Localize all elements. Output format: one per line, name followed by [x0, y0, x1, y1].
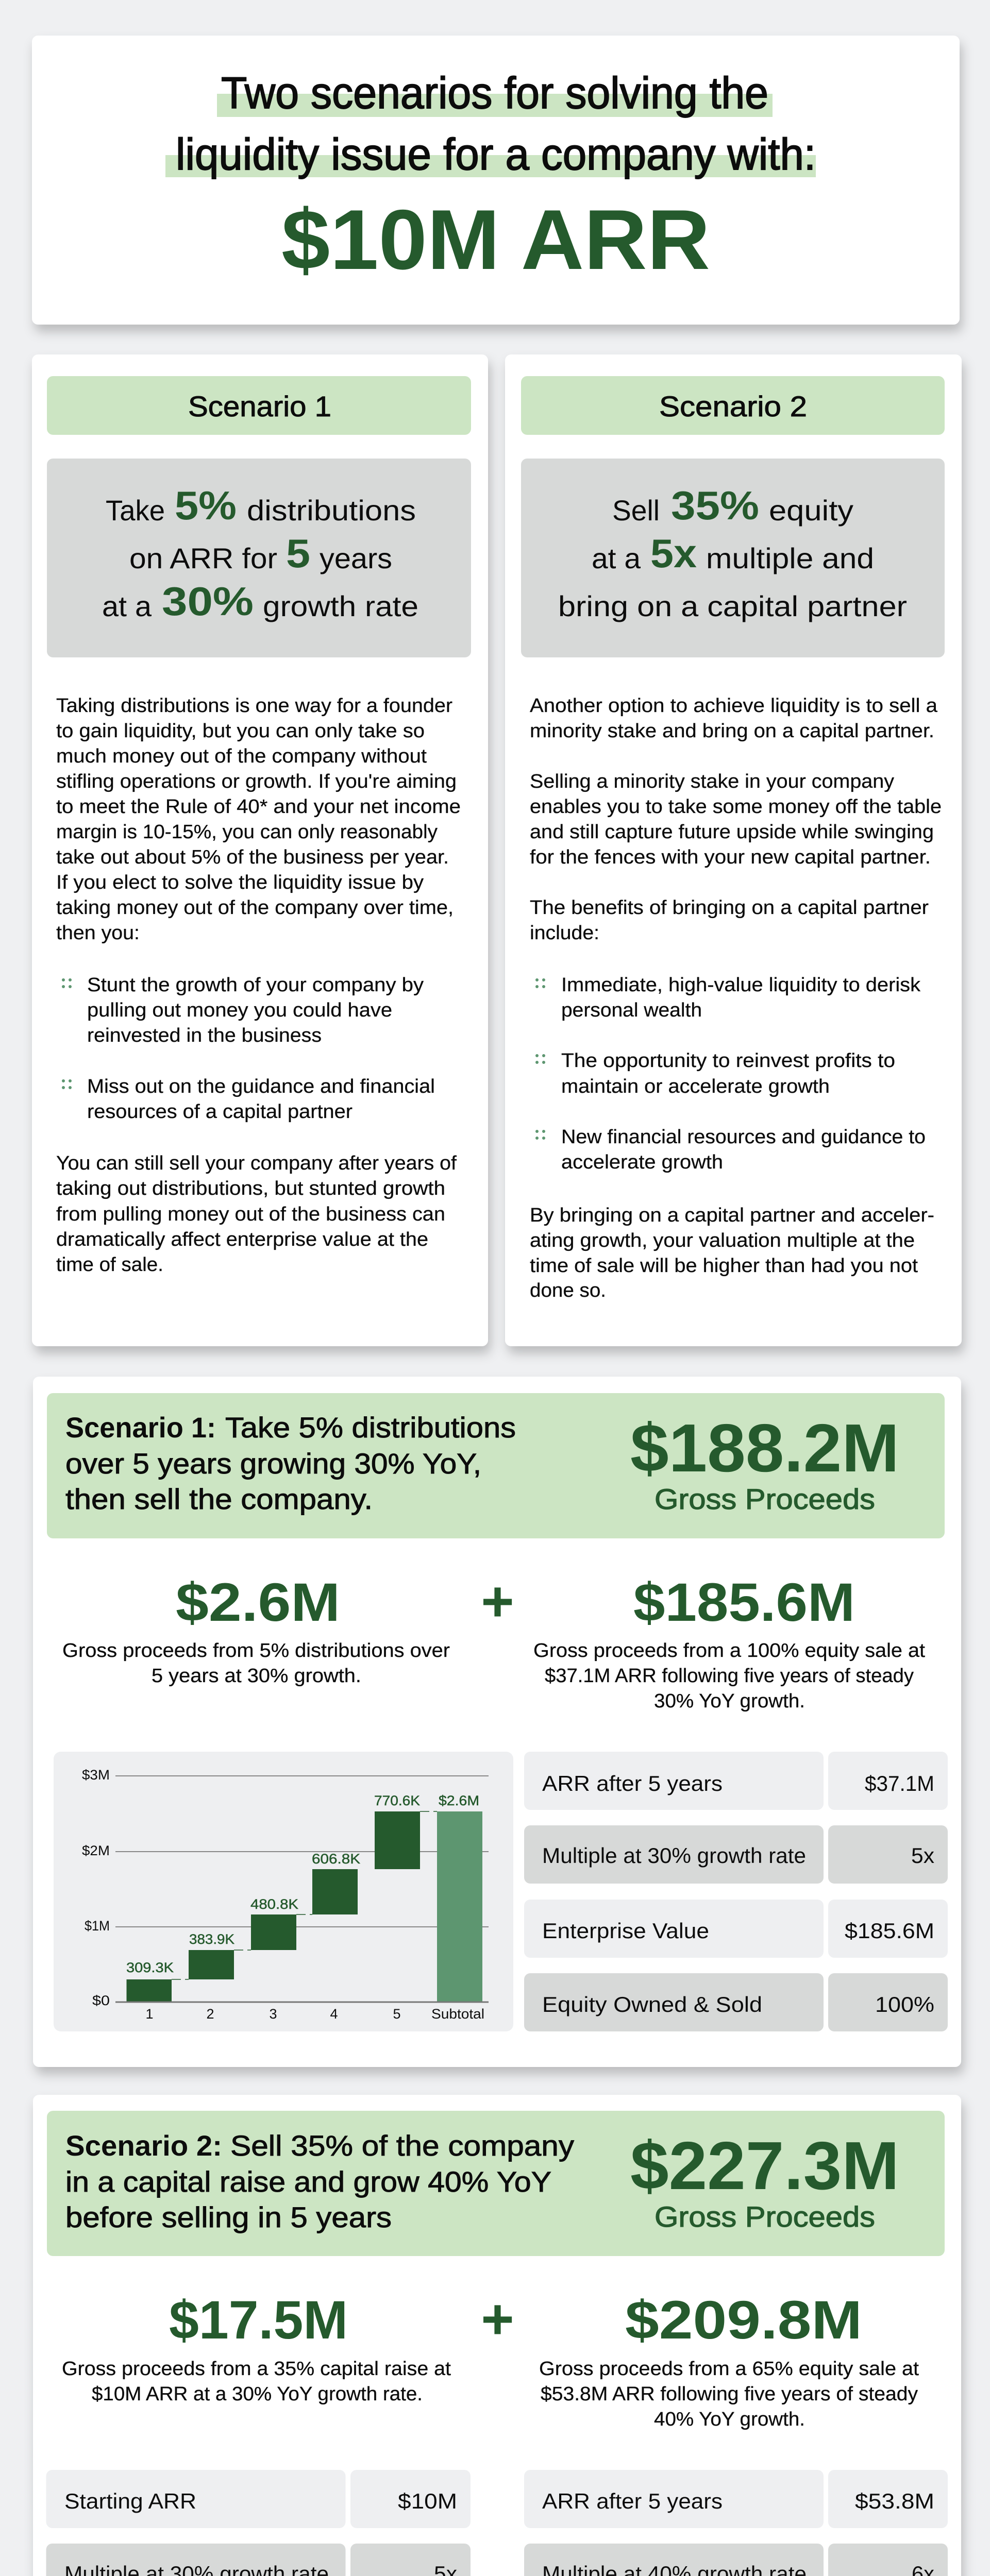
bullet: immediate liquidity: personal wealth	[561, 999, 702, 1021]
bullet: stunt the growth	[62, 974, 424, 1046]
callout: take 5% distributions: 30%	[162, 579, 254, 624]
panel: scenario 1 model	[33, 1377, 961, 2067]
header banner: scenario 1 summary: Scenario 1:	[65, 1411, 216, 1444]
table: exit metrics scenario 1: ARR after 5 years	[542, 1771, 723, 1795]
text block: taking distributions intro: taking money out of the company over time,	[56, 897, 454, 919]
x axis labels: 5	[393, 2006, 401, 2022]
headline figure: $10M ARR: $10M ARR	[281, 192, 710, 287]
figure: $17.5M capital raise: $17.5M	[169, 2290, 348, 2350]
bullet: stunt the growth: pulling out money you could have	[87, 999, 392, 1021]
callout: sell 35% equity: Sell	[612, 494, 660, 527]
text block: you can still sell: You can still sell your company after years of	[56, 1153, 457, 1174]
bullet: stunt the growth: reinvested in the business	[87, 1025, 322, 1046]
x axis labels: 2	[206, 2006, 214, 2022]
figure: $2.6M distributions	[62, 1572, 450, 1687]
bullet: immediate liquidity	[535, 974, 921, 1021]
text block: benefits intro: The benefits of bringing on a capital partner	[530, 897, 929, 919]
text block: taking distributions intro: margin is 10-15%, you can only reasonably	[56, 821, 438, 843]
callout: sell 35% equity: bring on a capital partner	[558, 590, 907, 622]
figure: $2.6M distributions: Gross proceeds from 5% distributions over	[62, 1640, 450, 1662]
figure: $185.6M equity sale: $37.1M ARR following five years of steady	[545, 1665, 914, 1687]
text block: by bringing on a capital partner: By bringing on a capital partner and acceler-	[530, 1205, 934, 1226]
text block: another option: minority stake and bring on a capital partner.	[530, 720, 934, 742]
x axis labels: 1	[145, 2006, 154, 2022]
figure: $209.8M equity sale: 40% YoY growth.	[654, 2409, 805, 2430]
text block: you can still sell: time of sale.	[56, 1254, 163, 1276]
y axis labels	[82, 1767, 110, 2008]
x axis labels: 3	[269, 2006, 277, 2022]
callout: sell 35% equity: 35%	[671, 483, 759, 528]
bullet: reinvest profits: The opportunity to reinvest profits to	[561, 1050, 895, 1072]
bullet: new financial resources: New financial resources and guidance to	[561, 1126, 926, 1148]
bars	[127, 1811, 482, 2002]
text block: another option	[530, 695, 938, 742]
text block: taking distributions intro: to meet the Rule of 40* and your net income	[56, 796, 461, 818]
callout: sell 35% equity: at a	[592, 542, 641, 574]
heading: Scenario 1: Scenario 1	[188, 390, 331, 422]
header banner: scenario 2 summary: before selling in 5 years	[65, 2201, 392, 2233]
text block: taking distributions intro	[56, 695, 461, 944]
text block: selling a minority stake: Selling a minority stake in your company	[530, 771, 894, 792]
callout: take 5% distributions: at a	[102, 590, 152, 622]
y axis labels: $3M	[82, 1767, 110, 1783]
heading: Scenario 2	[521, 376, 945, 435]
callout: sell 35% equity: multiple and	[706, 542, 874, 574]
x axis labels	[145, 2006, 484, 2022]
bar value labels: 309.3K	[126, 1960, 174, 1975]
text block: selling a minority stake	[530, 771, 942, 868]
text block: taking distributions intro: much money out of the company without	[56, 745, 427, 767]
table: capital raise metrics: $10M	[398, 2489, 457, 2513]
bullet: reinvest profits: maintain or accelerate growth	[561, 1076, 830, 1097]
y axis labels: $1M	[85, 1918, 110, 1934]
figure: $185.6M equity sale: $185.6M	[633, 1572, 855, 1633]
callout: take 5% distributions: 5	[286, 531, 310, 576]
bullet: new financial resources	[535, 1126, 926, 1173]
figure: $209.8M equity sale	[539, 2290, 919, 2430]
table: exit metrics scenario 1: Enterprise Value	[542, 1919, 709, 1943]
heading: Scenario 1	[47, 376, 471, 435]
callout: sell 35% equity	[521, 459, 945, 657]
panel: scenario 1 description	[32, 354, 488, 1346]
waterfall chart	[54, 1752, 513, 2031]
table: exit metrics scenario 2: ARR after 5 years	[542, 2489, 723, 2513]
figure: $17.5M capital raise: $10M ARR at a 30% YoY growth rate.	[92, 2383, 423, 2405]
figure: $17.5M capital raise	[62, 2290, 451, 2405]
table: exit metrics scenario 1: 100%	[875, 1992, 934, 2016]
text block: you can still sell: from pulling money out of the business can	[56, 1204, 445, 1225]
text block: taking distributions intro: take out about 5% of the business per year.	[56, 846, 449, 868]
text block: taking distributions intro: Taking distributions is one way for a founder	[56, 695, 452, 717]
header banner: scenario 2 summary	[47, 2111, 945, 2256]
text block: benefits intro: include:	[530, 922, 599, 944]
text block: taking distributions intro: If you elect to solve the liquidity issue by	[56, 872, 424, 893]
table: exit metrics scenario 1: $185.6M	[845, 1919, 934, 1943]
y axis labels: $2M	[82, 1843, 110, 1858]
header banner: scenario 1 summary: over 5 years growing 30% YoY,	[65, 1447, 481, 1480]
panel: scenario 2 description	[505, 354, 962, 1346]
text block: you can still sell: dramatically affect enterprise value at the	[56, 1229, 428, 1250]
title line 1: Two scenarios for solving the	[221, 69, 768, 118]
callout: take 5% distributions: Take	[106, 494, 165, 527]
table: exit metrics scenario 2	[524, 2470, 948, 2576]
heading: Scenario 2: Scenario 2	[659, 390, 807, 422]
figure: $209.8M equity sale: Gross proceeds from a 65% equity sale at	[539, 2358, 919, 2380]
text block: you can still sell: taking out distributions, but stunted growth	[56, 1178, 445, 1199]
bar value labels	[126, 1793, 479, 1975]
title highlight line 2	[165, 155, 816, 177]
callout: take 5% distributions: years	[320, 542, 392, 574]
bar value labels: 606.8K	[312, 1851, 360, 1867]
y axis labels: $0	[92, 1993, 110, 2008]
text block: by bringing on a capital partner: ating growth, your valuation multiple at the	[530, 1230, 915, 1251]
panel: title card	[32, 36, 960, 325]
bullet: miss out on guidance	[62, 1076, 435, 1123]
figure: $17.5M capital raise: Gross proceeds from a 35% capital raise at	[62, 2358, 451, 2380]
text block: taking distributions intro: to gain liquidity, but you can only take so	[56, 720, 425, 742]
table: exit metrics scenario 1: Multiple at 30% growth rate	[542, 1843, 806, 1868]
x axis labels: 4	[330, 2006, 338, 2022]
table: capital raise metrics: Starting ARR	[64, 2489, 196, 2513]
table: exit metrics scenario 1	[524, 1752, 948, 2031]
text block: you can still sell	[56, 1153, 457, 1276]
header banner: scenario 2 summary: Gross Proceeds	[655, 2200, 875, 2233]
figure: $209.8M equity sale: $53.8M ARR following five years of steady	[541, 2383, 918, 2405]
table: exit metrics scenario 1: Equity Owned & Sold	[542, 1992, 762, 2016]
figure: $2.6M distributions: $2.6M	[176, 1572, 340, 1633]
text block: benefits intro	[530, 897, 929, 944]
callout: take 5% distributions: growth rate	[263, 590, 418, 622]
header banner: scenario 1 summary: Gross Proceeds	[655, 1483, 875, 1515]
callout: sell 35% equity: equity	[769, 494, 853, 527]
bullet: miss out on guidance: Miss out on the guidance and financial	[87, 1076, 435, 1097]
x axis labels: Subtotal	[431, 2006, 484, 2022]
title highlight line 1	[217, 94, 773, 117]
figure: $209.8M equity sale: $209.8M	[625, 2290, 862, 2350]
table: exit metrics scenario 1: $37.1M	[865, 1771, 934, 1795]
text block: another option: Another option to achieve liquidity is to sell a	[530, 695, 938, 717]
panel: scenario 2 model	[33, 2095, 961, 2576]
header banner: scenario 1 summary: then sell the company.	[65, 1483, 373, 1515]
figure: $185.6M equity sale	[533, 1572, 925, 1712]
bullet: immediate liquidity: Immediate, high-value liquidity to derisk	[561, 974, 921, 996]
text block: by bringing on a capital partner: time of sale will be higher than had you not	[530, 1255, 918, 1277]
plus sign: +	[481, 2287, 514, 2351]
callout: sell 35% equity: 5x	[650, 531, 697, 576]
callout: take 5% distributions: distributions	[247, 494, 416, 527]
bullet: new financial resources: accelerate growth	[561, 1151, 723, 1173]
text block: selling a minority stake: and still capture future upside while swinging	[530, 821, 934, 843]
table: exit metrics scenario 1: 5x	[911, 1843, 934, 1868]
plus sign: +	[481, 1570, 514, 1633]
text block: by bringing on a capital partner: done so.	[530, 1280, 606, 1301]
title line 2: liquidity issue for a company with:	[176, 130, 816, 179]
figure: $185.6M equity sale: 30% YoY growth.	[654, 1690, 805, 1712]
bullet: stunt the growth: Stunt the growth of your company by	[87, 974, 424, 996]
figure: $2.6M distributions: 5 years at 30% growth.	[152, 1665, 361, 1687]
text block: taking distributions intro: stifling operations or growth. If you're aiming	[56, 771, 457, 792]
bar value labels: 480.8K	[250, 1896, 298, 1912]
text block: selling a minority stake: enables you to take some money off the table	[530, 796, 942, 818]
bar value labels: $2.6M	[439, 1793, 479, 1808]
bullet: miss out on guidance: resources of a capital partner	[87, 1101, 353, 1123]
callout: take 5% distributions: on ARR for	[129, 542, 277, 574]
header banner: scenario 1 summary: Take 5% distributions	[225, 1411, 516, 1444]
table: exit metrics scenario 2: $53.8M	[855, 2489, 934, 2513]
header banner: scenario 2 summary: in a capital raise and grow 40% YoY	[65, 2165, 551, 2198]
header banner: scenario 2 summary: Sell 35% of the company	[230, 2129, 574, 2162]
bar value labels: 383.9K	[189, 1931, 234, 1947]
header banner: scenario 1 summary: $188.2M	[630, 1410, 899, 1486]
callout: take 5% distributions: 5%	[175, 483, 237, 528]
callout: take 5% distributions	[47, 459, 471, 657]
text block: by bringing on a capital partner	[530, 1205, 934, 1301]
table: capital raise metrics	[46, 2470, 471, 2576]
bar value labels: 770.6K	[374, 1793, 420, 1808]
bullet: reinvest profits	[535, 1050, 895, 1097]
text block: selling a minority stake: for the fences with your new capital partner.	[530, 846, 931, 868]
text block: taking distributions intro: then you:	[56, 922, 140, 944]
header banner: scenario 2 summary: Scenario 2:	[65, 2129, 222, 2162]
header banner: scenario 1 summary	[47, 1393, 945, 1538]
header banner: scenario 2 summary: $227.3M	[630, 2128, 899, 2204]
figure: $185.6M equity sale: Gross proceeds from a 100% equity sale at	[533, 1640, 925, 1662]
